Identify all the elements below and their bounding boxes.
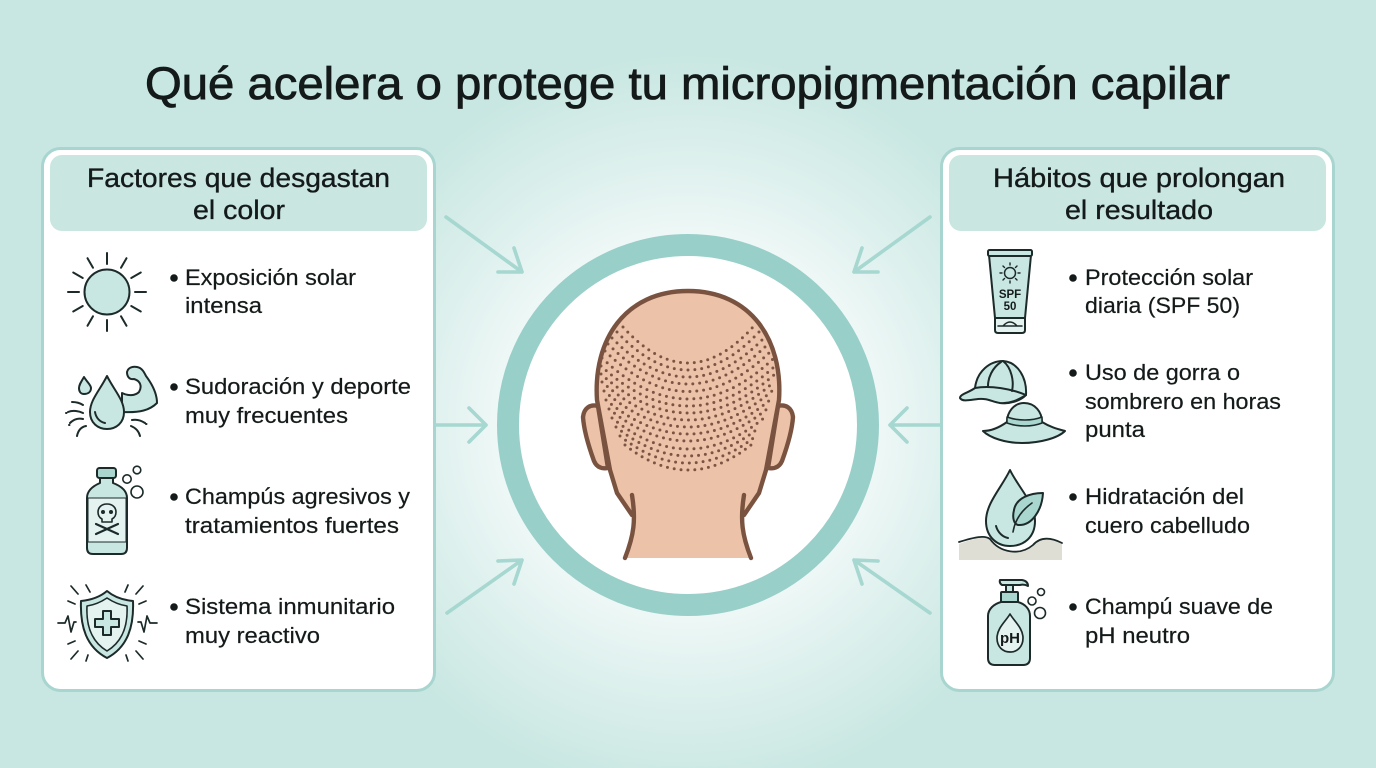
icon: sunscreen tube: 50 xyxy=(1004,301,1016,313)
head skin xyxy=(597,291,779,558)
neck lines xyxy=(625,495,751,558)
central circle with head xyxy=(508,245,868,605)
panel heading: hábitos: el resultado xyxy=(1065,195,1213,225)
text: champú suave xyxy=(1069,594,1273,648)
panel heading: hábitos xyxy=(949,155,1326,231)
text: exposición solar xyxy=(170,265,357,318)
panel heading: factores xyxy=(50,155,427,231)
icon: sunscreen tube xyxy=(988,250,1032,333)
text: hidratación: cuero cabelludo xyxy=(1085,513,1250,538)
icon: cap and hat xyxy=(960,361,1065,443)
panel heading: factores: Factores que desgastan xyxy=(87,163,390,193)
icon: sweat drop and muscle xyxy=(66,367,157,436)
text: sistema inmunitario: muy reactivo xyxy=(185,623,320,648)
text: protección solar: Protección solar xyxy=(1085,265,1254,290)
icon: pump bottle pH xyxy=(988,580,1046,665)
text: uso de gorra: sombrero en horas xyxy=(1085,389,1281,414)
icon: sunscreen tube: SPF xyxy=(999,289,1021,301)
panel: hábitos que prolongan el resultado xyxy=(942,148,1334,690)
text: protección solar: diaria (SPF 50) xyxy=(1085,293,1240,318)
text: exposición solar: Exposición solar xyxy=(185,265,357,290)
arrow: middle left xyxy=(436,408,486,442)
text: hidratación: Hidratación del xyxy=(1085,484,1244,509)
text: sudoración: Sudoración y deporte xyxy=(185,374,411,399)
ears xyxy=(583,405,793,468)
icon: toxic bottle xyxy=(87,466,143,554)
head illustration xyxy=(583,291,793,558)
text: sistema inmunitario: Sistema inmunitario xyxy=(185,594,395,619)
icon: pump bottle pH: pH xyxy=(1000,630,1020,647)
text: champú suave: Champú suave de xyxy=(1085,594,1273,619)
text: sudoración: muy frecuentes xyxy=(185,403,348,428)
icon: shield xyxy=(58,585,157,661)
arrow: bottom left xyxy=(447,560,522,613)
text: uso de gorra xyxy=(1069,360,1281,442)
icon: sun xyxy=(68,253,146,331)
panel heading: factores: el color xyxy=(193,195,285,225)
text: champús agresivos: tratamientos fuertes xyxy=(185,513,399,538)
icon: water drop with leaf xyxy=(959,470,1062,560)
micropigmentation dots xyxy=(601,327,775,470)
text: champú suave: pH neutro xyxy=(1085,623,1190,648)
text: protección solar xyxy=(1069,265,1254,318)
text: uso de gorra: punta xyxy=(1085,417,1146,442)
arrow: top right xyxy=(854,217,930,272)
arrow: top left xyxy=(446,217,522,272)
text: exposición solar: intensa xyxy=(185,293,263,318)
text: champús agresivos xyxy=(170,484,411,538)
text: uso de gorra: Uso de gorra o xyxy=(1085,360,1240,385)
title: Qué acelera o protege tu micropigmentación capilar xyxy=(145,58,1230,109)
panel heading: hábitos: Hábitos que prolongan xyxy=(993,163,1285,193)
text: hidratación xyxy=(1069,484,1250,538)
head outline xyxy=(597,291,779,515)
arrow: bottom right xyxy=(854,560,930,613)
text: sistema inmunitario xyxy=(170,594,395,648)
panel: factores que desgastan el color xyxy=(42,148,434,690)
arrow: middle right xyxy=(890,408,940,442)
text: sudoración xyxy=(170,374,411,428)
text: champús agresivos: Champús agresivos y xyxy=(185,484,411,509)
